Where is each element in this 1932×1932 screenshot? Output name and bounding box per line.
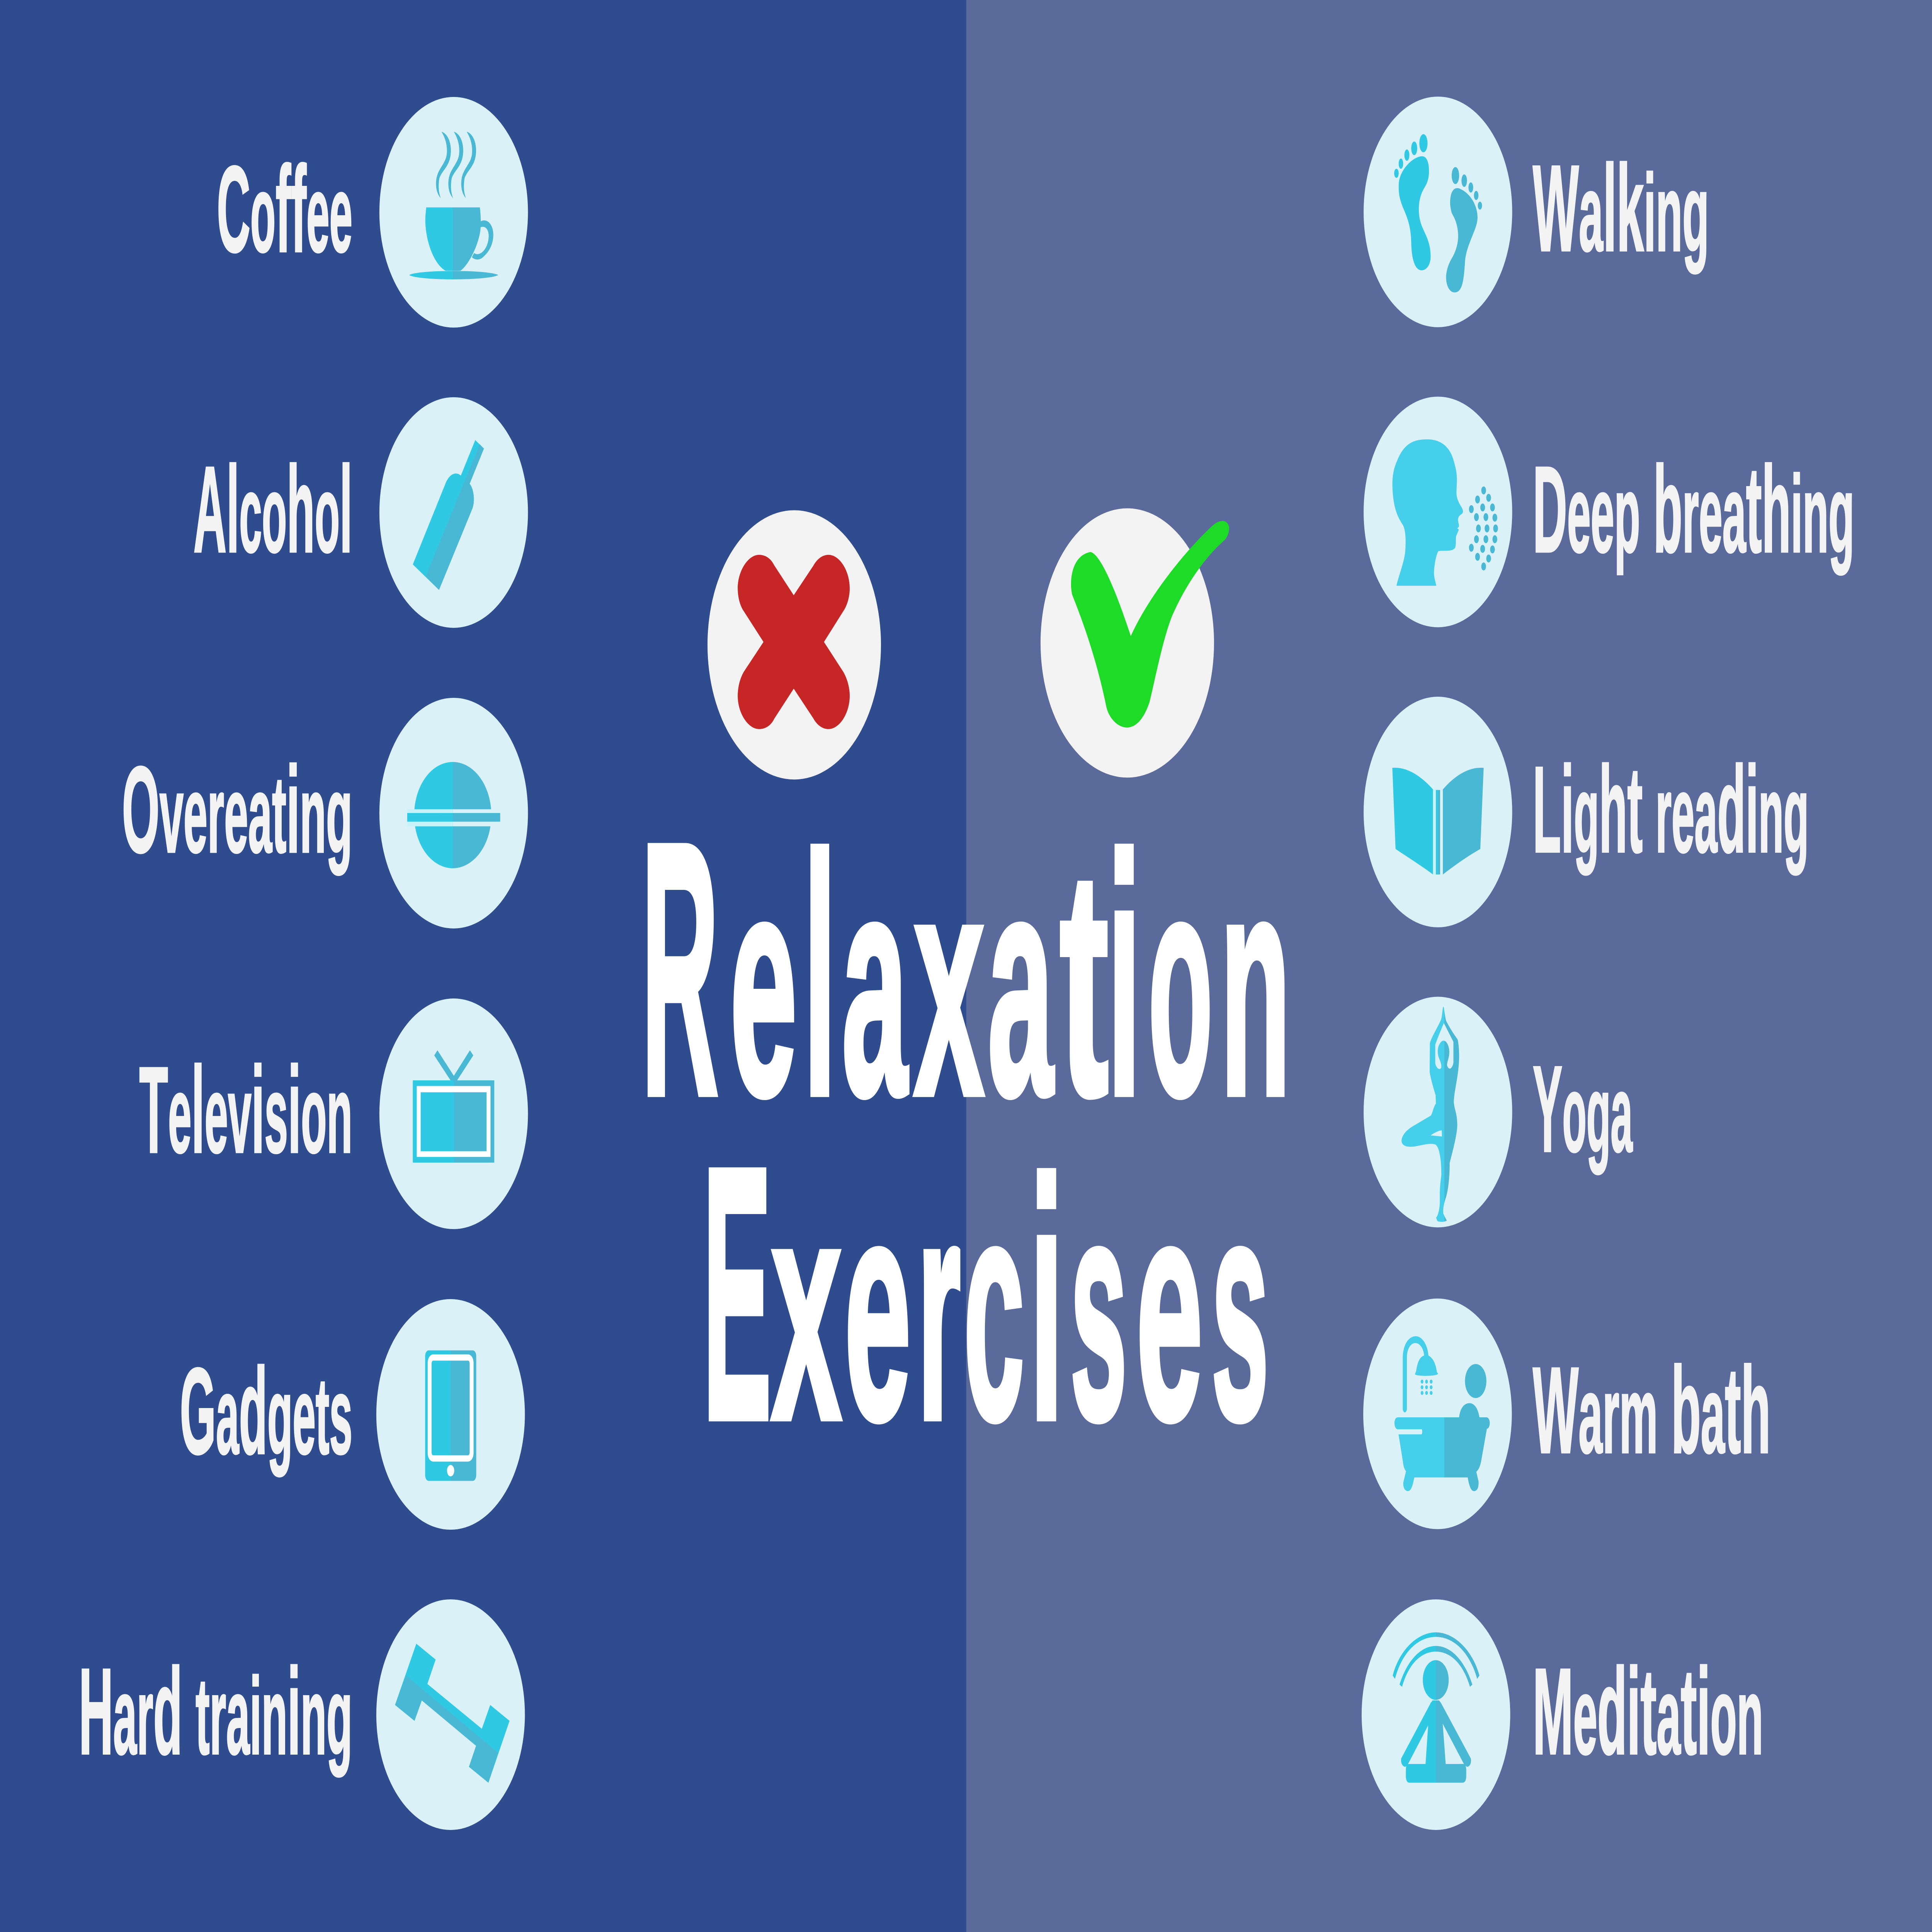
icon: smartphone [425,1350,476,1481]
item: Warm bath [1363,1299,1770,1529]
panel: things to do (right side) [966,0,1932,1932]
icon: television [413,1050,494,1163]
icon: dumbbell [395,1644,510,1783]
label: Overeating: Overeating [122,742,352,878]
label: Meditation: Meditation [1533,1643,1763,1780]
item: Overeating [122,698,528,929]
title line 1: e [730,810,797,1160]
title line 1: i [1107,786,1141,1166]
icon: footprints [1394,134,1482,293]
label: Yoga: Yoga [1533,1041,1633,1177]
item: Deep breathing [1364,396,1854,627]
item: Meditation [1362,1599,1763,1830]
title line 1: l [803,786,837,1166]
title line 2: E [703,1092,771,1494]
label: Coffee: Coffee [217,141,352,278]
icon: red cross badge [707,510,881,779]
panel: things to avoid (left side) [0,0,966,1932]
title [641,768,1291,1494]
title line 1: R [641,768,719,1170]
icon: coffee cup [409,132,498,279]
item: Walking [1364,97,1709,327]
item: Coffee [217,97,528,328]
title line 2: e [1136,1134,1203,1485]
title line 2: c [964,1134,1024,1485]
item: Gadgets [180,1299,525,1530]
item: Yoga [1364,997,1633,1227]
icon: bottle [413,440,484,590]
icon: burger [407,762,500,868]
title line 1: t [1060,803,1109,1162]
title line 1: a [842,810,908,1160]
title line 2: s [1070,1134,1127,1485]
title line 2: e [845,1134,911,1485]
label: Gadgets: Gadgets [180,1343,352,1480]
item: Alcohol [194,397,528,628]
title line 1: a [988,810,1054,1160]
label: Alcohol: Alcohol [194,442,352,578]
title line 1: x [914,810,985,1160]
title line 1: o [1148,810,1213,1160]
title line 1: n [1220,810,1291,1160]
item: Light reading [1364,697,1809,927]
item: Television [139,998,528,1229]
icon: yoga figure [1401,1007,1459,1222]
label: Television: Television [139,1042,352,1179]
title line 2: r [917,1134,961,1485]
title line 2: s [1211,1134,1269,1485]
title line 2: i [1029,1110,1064,1491]
icon: open book [1392,768,1484,874]
icon: bathtub with shower [1395,1336,1490,1491]
title line 2: x [771,1134,842,1485]
icon: head breathing [1393,439,1498,586]
label: Light reading: Light reading [1533,742,1809,878]
label: Hard training: Hard training [79,1643,352,1780]
label: Warm bath: Warm bath [1533,1342,1770,1479]
item: Hard training [79,1599,525,1830]
icon: green check badge [1041,509,1229,777]
label: Deep breathing: Deep breathing [1533,442,1854,578]
label: Walking: Walking [1533,140,1709,277]
icon: meditating figure [1393,1633,1480,1783]
